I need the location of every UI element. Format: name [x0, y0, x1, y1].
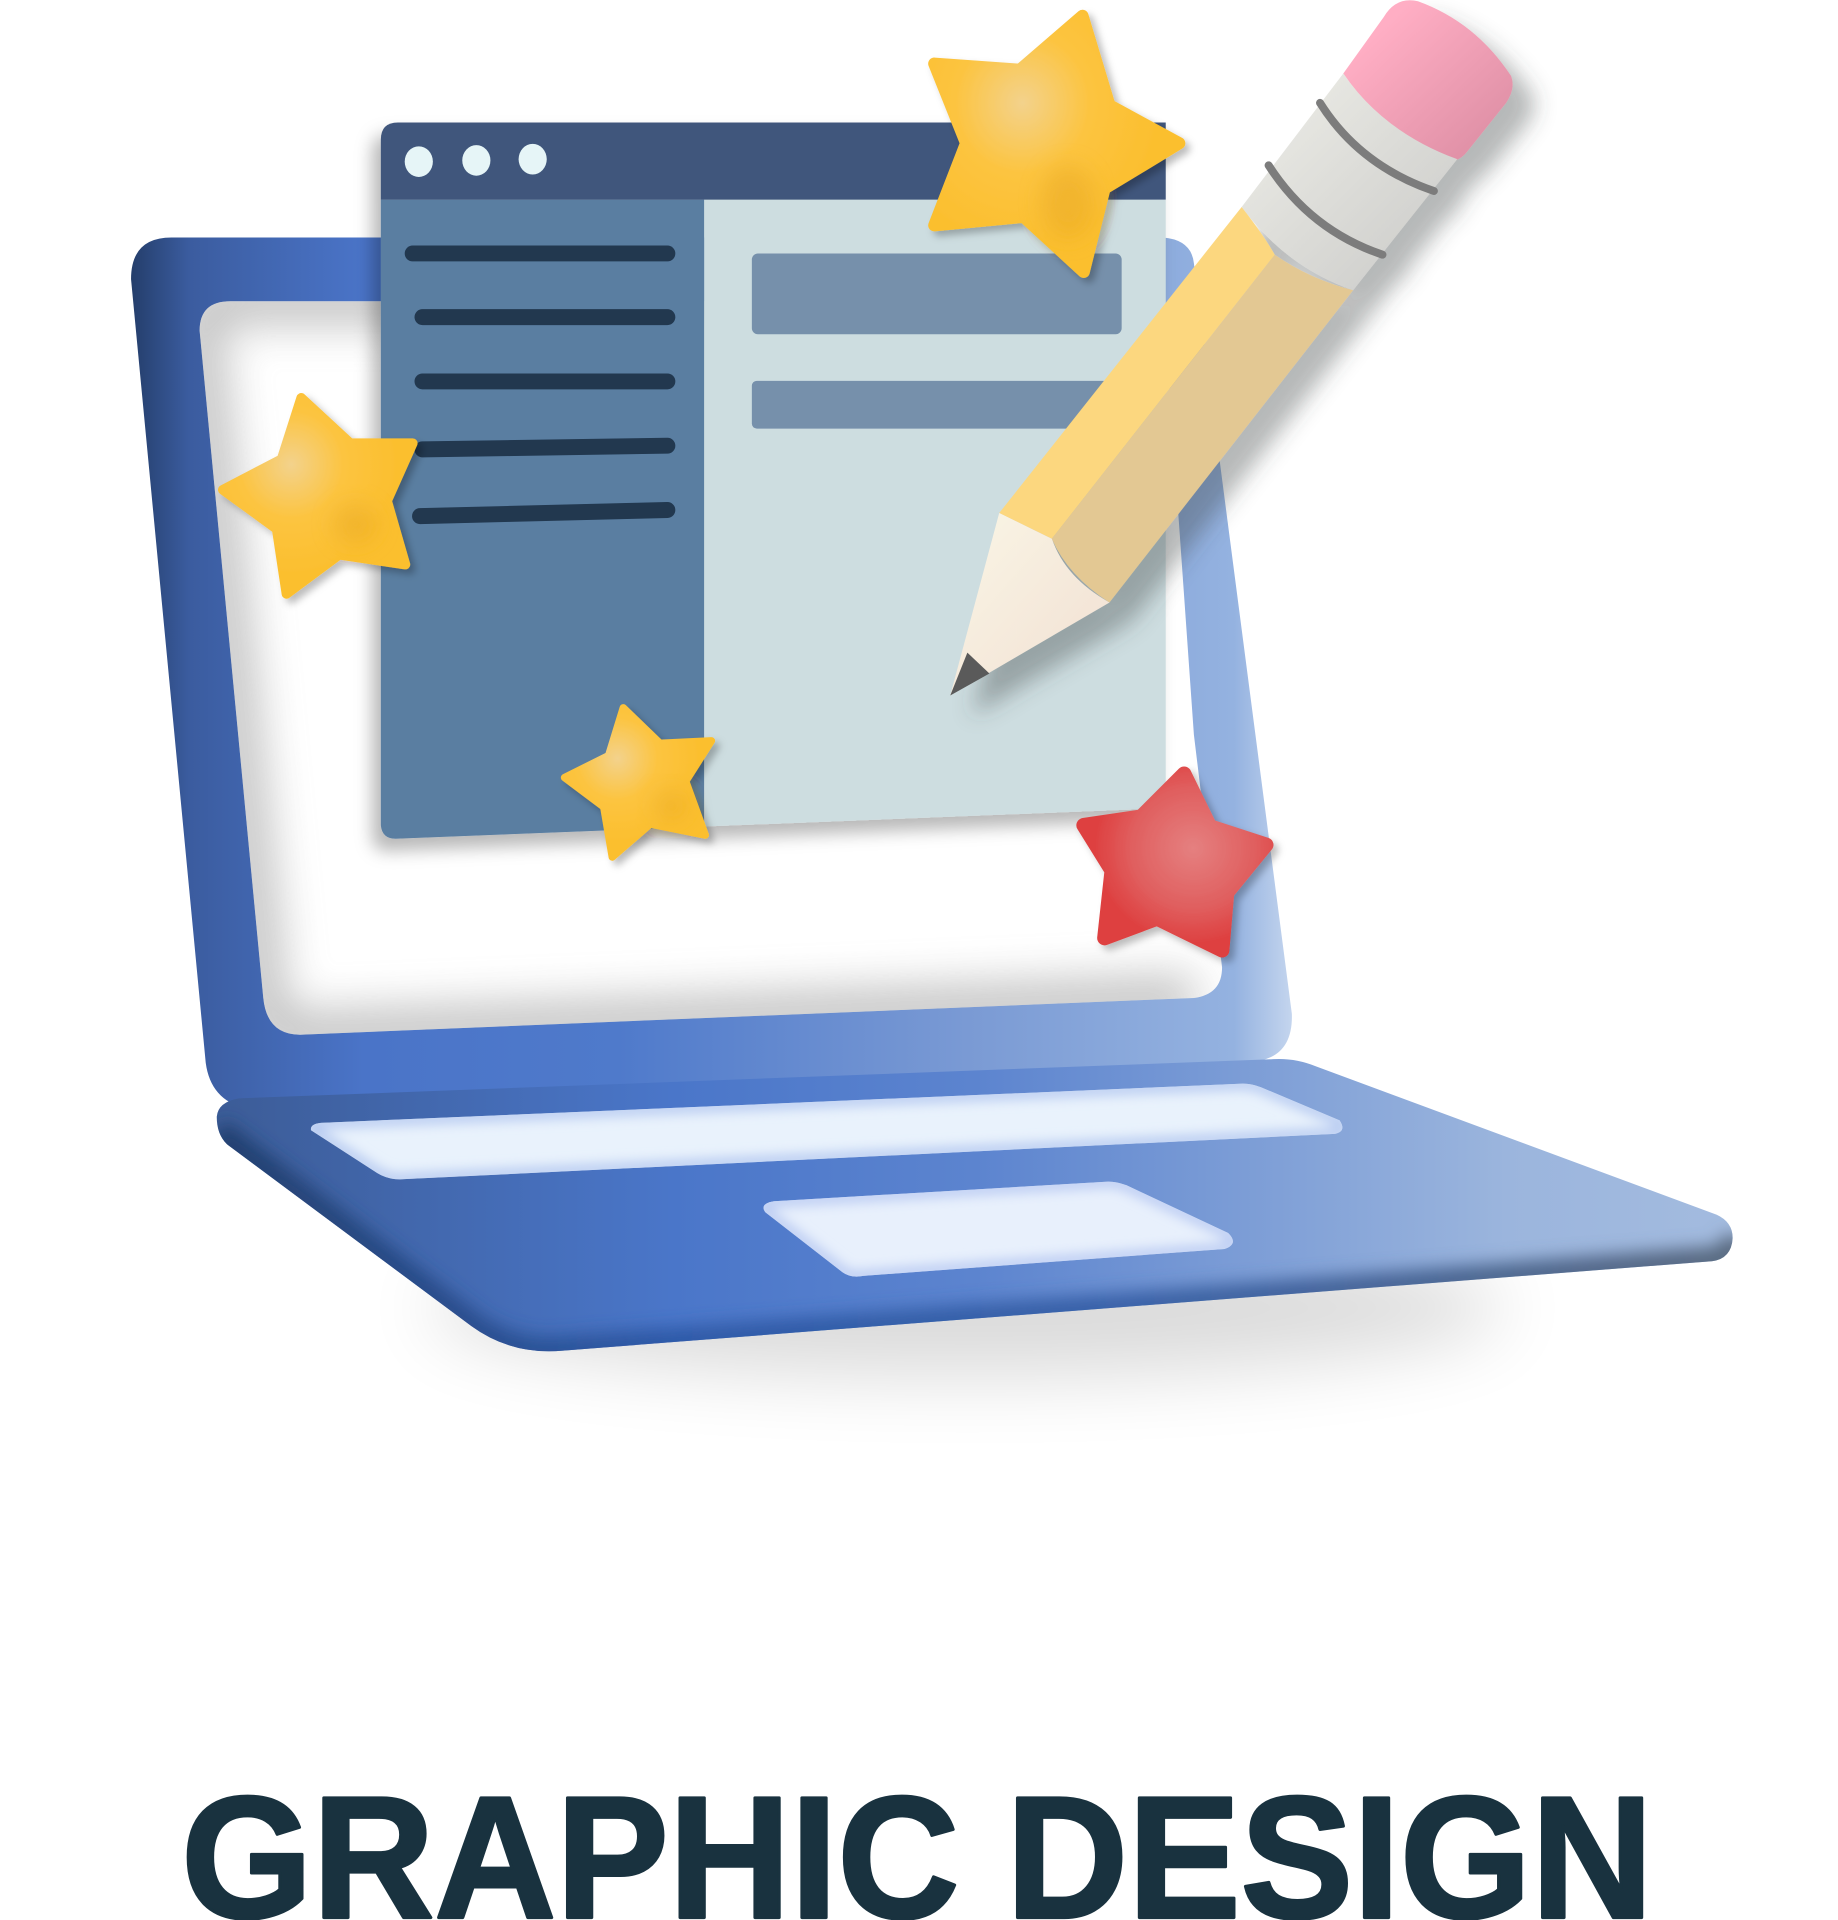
star: bottom centre [565, 708, 711, 857]
laptop screen [200, 301, 1222, 1035]
pencil eraser [1343, 0, 1513, 161]
sidebar lines [413, 253, 667, 516]
pencil body [999, 207, 1275, 539]
laptop lid [131, 238, 1292, 1108]
window title bar [381, 122, 1166, 200]
touchpad [764, 1182, 1233, 1277]
keyboard area [311, 1084, 1342, 1179]
content blocks [752, 253, 1122, 429]
pencil tip [950, 513, 1109, 696]
star: top right [934, 16, 1179, 272]
pencil [950, 0, 1513, 696]
laptop base [217, 1059, 1739, 1351]
window sidebar [381, 200, 704, 839]
window dots [405, 144, 547, 177]
ground shadow [429, 1239, 1506, 1376]
window content right [704, 200, 1166, 827]
star: red [1084, 774, 1266, 950]
star: left [223, 398, 413, 594]
pencil ferrule [1242, 73, 1457, 290]
app window [381, 122, 1166, 839]
